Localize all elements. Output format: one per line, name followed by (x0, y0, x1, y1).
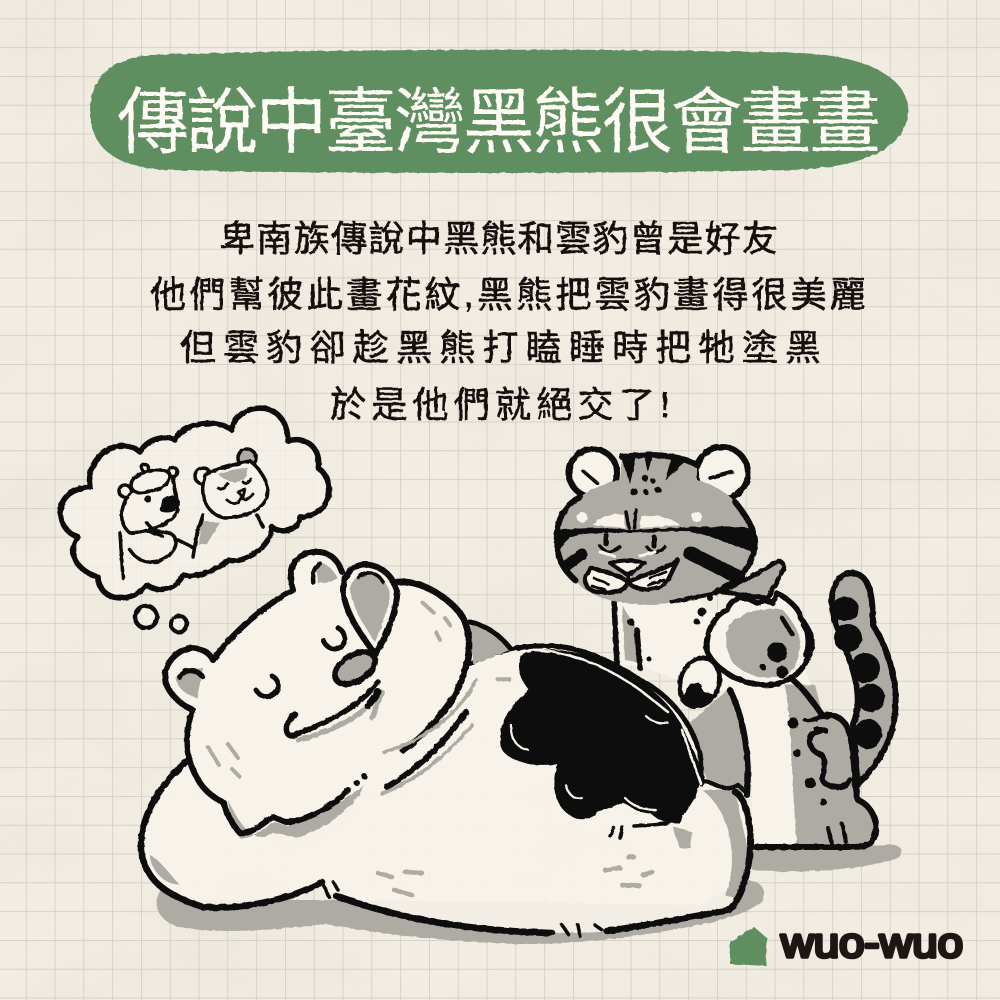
leopard hand holding brush tip (680, 658, 720, 709)
intro text block: 於是他們就絕交了! (330, 384, 670, 425)
bear ears (176, 668, 203, 698)
bear head shading (228, 785, 365, 838)
head shape (165, 552, 469, 833)
title banner: 傳說中臺灣黑熊很會畫畫 (117, 83, 881, 163)
bear head and paw (165, 552, 510, 838)
thought bubble (60, 408, 329, 632)
leopard ground shadow (750, 844, 902, 872)
leopard body (640, 610, 877, 847)
leopard tail (831, 573, 896, 784)
black paint blob (502, 650, 701, 822)
illustration (60, 408, 902, 944)
intro text block (150, 218, 866, 425)
dream: left bear with nightcap (119, 464, 192, 578)
leopard neck (614, 595, 725, 690)
ground shadow under bear (157, 880, 764, 944)
other arm behind (470, 623, 510, 664)
bear arm lines (397, 582, 469, 750)
logo house icon (730, 927, 767, 966)
intro text block: 但雲豹卻趁黑熊打瞌睡時把牠塗黑 (180, 327, 821, 368)
bear paw teardrop (343, 564, 397, 654)
bear arm behind the paint (690, 690, 748, 795)
leopard head (557, 447, 755, 605)
intro text block: 他們幫彼此畫花紋,黑熊把雲豹畫得很美麗 (150, 274, 866, 315)
clouded leopard (557, 447, 902, 872)
dream: right bear (193, 449, 268, 557)
paintbrush and paw (706, 561, 812, 685)
intro text block: 卑南族傳說中黑熊和雲豹曾是好友 (219, 218, 778, 259)
bear eyes and smile (256, 628, 345, 697)
title banner (90, 50, 908, 173)
logo: wuo-wuo (780, 919, 963, 966)
bear body (141, 646, 750, 936)
